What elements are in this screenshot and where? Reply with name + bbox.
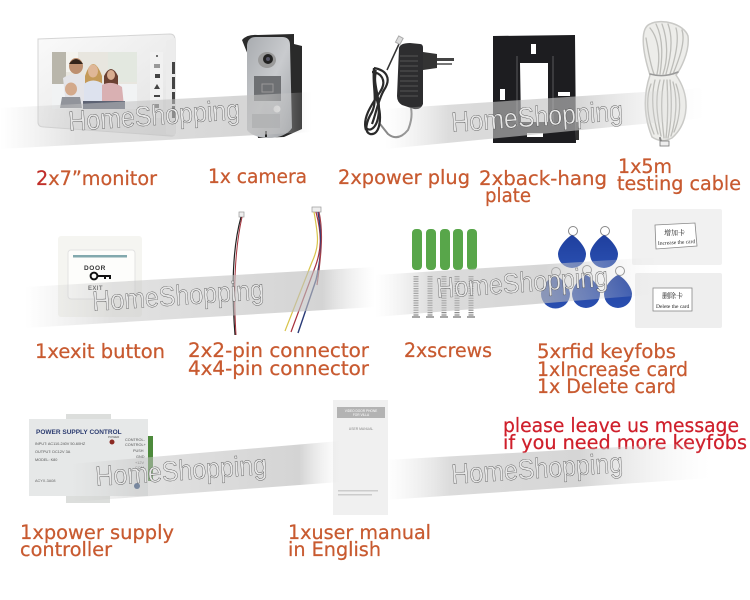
caption: back-hang plate: 2xback-hang bbox=[479, 167, 607, 190]
icon: testing cable bbox=[643, 22, 688, 146]
caption: connectors: 2x2-pin connector bbox=[188, 339, 370, 362]
icon: power supply controller: OUTPUT: DC12V 3A bbox=[35, 450, 71, 454]
icon: increase card: Increase the card bbox=[658, 239, 696, 247]
key symbol bbox=[91, 273, 110, 279]
icon: power supply controller: GND bbox=[136, 455, 145, 459]
icon: power supply controller: +12V bbox=[135, 461, 144, 465]
watermark band: middle left: HomeShopping bbox=[91, 274, 265, 317]
watermark band: bottom right bbox=[385, 442, 710, 500]
icon: user manual: USER MANUAL bbox=[349, 427, 373, 431]
watermark band: bottom right: HomeShopping bbox=[450, 447, 624, 490]
caption: user manual: 1xuser manual bbox=[288, 521, 431, 544]
caption: testing cable: testing cable bbox=[617, 172, 741, 195]
monitor screen bbox=[52, 52, 137, 109]
icon: delete card: Delete the card bbox=[656, 304, 690, 310]
caption: testing cable bbox=[617, 155, 741, 195]
icon: user manual bbox=[333, 400, 388, 515]
icon: power supply controller: COM bbox=[135, 466, 144, 470]
icon: exit button: EXIT bbox=[88, 286, 103, 292]
caption: power supply controller: controller bbox=[20, 538, 113, 561]
icon: power plug bbox=[365, 36, 454, 137]
caption: exit button: 1xexit button bbox=[35, 340, 165, 363]
icon: power supply controller: CONTROL- bbox=[125, 438, 146, 442]
caption: back-hang plate bbox=[479, 167, 607, 207]
watermark band: middle right bbox=[375, 257, 660, 317]
caption: power supply controller bbox=[20, 521, 174, 561]
caption: keyfobs and cards bbox=[537, 340, 688, 398]
watermark band: top left bbox=[0, 92, 312, 149]
icon: delete card bbox=[635, 273, 722, 328]
icon: wall anchors bbox=[412, 229, 477, 270]
caption: keyfobs and cards: 5xrfid keyfobs bbox=[537, 340, 676, 363]
icon: increase card: 增加卡 bbox=[664, 228, 685, 237]
callout: more keyfobs message: if you need more keyfobs bbox=[503, 431, 747, 454]
icon: monitor bbox=[38, 34, 175, 136]
caption: power supply controller: 1xpower supply bbox=[20, 521, 174, 544]
caption: screws: 2xscrews bbox=[404, 339, 492, 362]
watermark band: top right: HomeShopping bbox=[450, 95, 624, 138]
icon: increase card bbox=[632, 209, 722, 265]
icon: screws bbox=[412, 276, 475, 317]
icon: 4-pin connector bbox=[285, 207, 321, 333]
watermark band: bottom left: HomeShopping bbox=[94, 449, 268, 492]
icon: user manual: VIDEO DOOR PHONE bbox=[345, 409, 377, 413]
callout: more keyfobs message bbox=[503, 414, 747, 454]
icon: power supply controller: PUSH bbox=[133, 449, 144, 453]
caption: keyfobs and cards: 1x Delete card bbox=[537, 375, 676, 398]
caption: user manual bbox=[288, 521, 431, 561]
monitor buttons bbox=[150, 52, 163, 118]
icon: exit button bbox=[58, 236, 142, 317]
icon: power supply controller: ACYX-3A08 bbox=[35, 479, 55, 483]
watermark band: middle right: HomeShopping bbox=[435, 261, 609, 304]
watermark band: top left: HomeShopping bbox=[67, 94, 241, 137]
caption: monitor: 2x7”monitor bbox=[36, 167, 158, 190]
caption: connectors: 4x4-pin connector bbox=[188, 357, 370, 380]
caption: power plug: 2xpower plug bbox=[338, 166, 470, 189]
watermark band: bottom left bbox=[70, 441, 340, 502]
caption: keyfobs and cards: 1xIncrease card bbox=[537, 358, 688, 381]
icon: rfid keyfobs bbox=[541, 226, 632, 308]
icon: delete card: 删除卡 bbox=[662, 291, 683, 300]
caption: camera: 1x camera bbox=[208, 165, 307, 188]
icon: power supply controller: CONTROL+ bbox=[125, 443, 147, 447]
icon: power supply controller bbox=[29, 414, 153, 503]
icon: back-hang plate bbox=[493, 35, 579, 143]
icon: power supply controller: POWER bbox=[108, 435, 120, 439]
caption: back-hang plate: plate bbox=[485, 184, 531, 207]
icon: door camera bbox=[242, 34, 302, 138]
callout: more keyfobs message: please leave us message bbox=[503, 414, 739, 437]
icon: exit button: DOOR bbox=[84, 265, 106, 272]
caption: testing cable: 1x5m bbox=[618, 155, 672, 178]
icon: power supply controller: MODEL: K80 bbox=[35, 458, 57, 462]
caption: user manual: in English bbox=[288, 538, 381, 561]
icon: user manual: FOR VILLA bbox=[353, 413, 370, 417]
icon: power supply controller: INPUT: AC110-240V 50-60HZ bbox=[35, 442, 86, 446]
watermark band: top right bbox=[385, 88, 705, 149]
caption: connectors bbox=[188, 339, 370, 380]
watermark band: middle left bbox=[25, 267, 375, 328]
icon: power supply controller: POWER SUPPLY CONTROL bbox=[36, 429, 122, 436]
icon: 2-pin connector bbox=[233, 212, 244, 335]
